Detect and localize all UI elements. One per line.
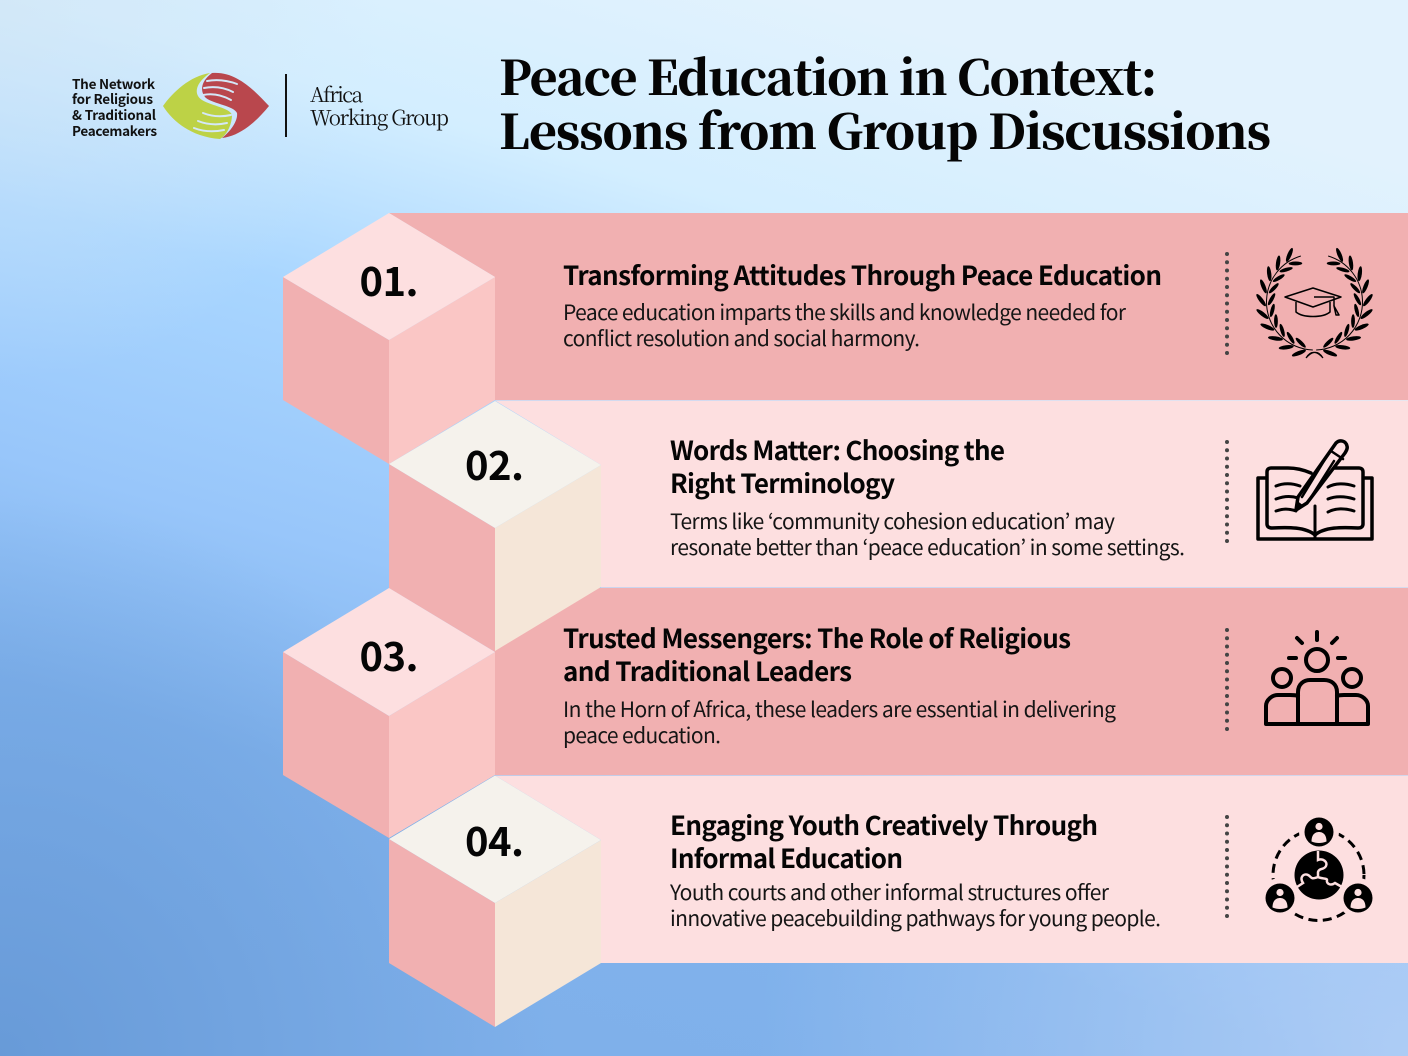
logo organisation name: Peacemakers (72, 120, 157, 140)
body 2 (670, 506, 1185, 562)
logo divider (285, 74, 287, 137)
body 1: conflict resolution and social harmony. (563, 323, 920, 353)
icon: open book with pencil (1258, 441, 1372, 539)
body 4: Youth courts and other informal structures offer (669, 877, 1110, 907)
body 4: innovative peacebuilding pathways for young people. (670, 903, 1161, 933)
body 3: In the Horn of Africa, these leaders are essential in delivering (563, 694, 1116, 724)
logo: The Network for Religious and Traditional Peacemakers (72, 73, 449, 140)
heading 4 (670, 806, 1098, 876)
heading 2 (670, 431, 1005, 501)
body 3: peace education. (563, 720, 721, 750)
band 3 (389, 588, 1408, 775)
cube 2 with number: 02. (465, 434, 524, 492)
heading 2: Words Matter: Choosing the (670, 431, 1005, 468)
title: Peace Education in Context: (499, 40, 1157, 109)
icon: network of people around puzzle globe (1260, 812, 1378, 920)
band 4 (495, 776, 1408, 963)
heading 4: Engaging Youth Creatively Through (670, 806, 1098, 843)
body 1 (563, 297, 1127, 353)
icon: laurel wreath with graduation cap (1255, 246, 1374, 360)
logo mark: clasped hands eye (163, 73, 269, 139)
title (499, 40, 1271, 163)
band 1 (389, 213, 1408, 400)
cube 4 with number: 04. (465, 810, 524, 868)
cube 4 with number (389, 776, 601, 1027)
body 3 (563, 694, 1116, 750)
logo organisation name: for Religious (72, 88, 153, 108)
band 2 (495, 400, 1408, 588)
logo organisation name: & Traditional (72, 104, 156, 124)
logo organisation name (72, 73, 157, 140)
text block 4 (669, 806, 1161, 933)
working group name (310, 78, 449, 131)
text block 2 (670, 431, 1185, 562)
heading 1: Transforming Attitudes Through Peace Education (563, 256, 1162, 293)
dashed ring (1273, 830, 1364, 920)
text block 3 (563, 619, 1116, 750)
body 2: resonate better than ‘peace education’ in some settings. (670, 532, 1185, 562)
icon: people with radiating leader (1266, 632, 1368, 724)
heading 3: and Traditional Leaders (563, 652, 852, 689)
cube 1 with number (283, 213, 495, 464)
cube 2 with number (389, 401, 601, 651)
working group name: Africa (310, 78, 364, 108)
body 4 (669, 877, 1161, 933)
heading 2: Right Terminology (670, 464, 895, 501)
body 2: Terms like ‘community cohesion education’ may (670, 506, 1115, 536)
heading 3: Trusted Messengers: The Role of Religious (563, 619, 1071, 656)
cube 1 with number: 01. (360, 250, 418, 308)
puzzle globe (1294, 850, 1344, 900)
body 1: Peace education imparts the skills and knowledge needed for (563, 297, 1127, 327)
logo organisation name: The Network (72, 73, 156, 93)
heading 4: Informal Education (670, 839, 903, 876)
text block 1 (563, 256, 1162, 353)
title: Lessons from Group Discussions (499, 94, 1271, 163)
cube 3 with number: 03. (360, 625, 418, 683)
working group name: Working Group (310, 101, 449, 131)
heading 3 (563, 619, 1071, 689)
cube 3 with number (283, 588, 495, 838)
